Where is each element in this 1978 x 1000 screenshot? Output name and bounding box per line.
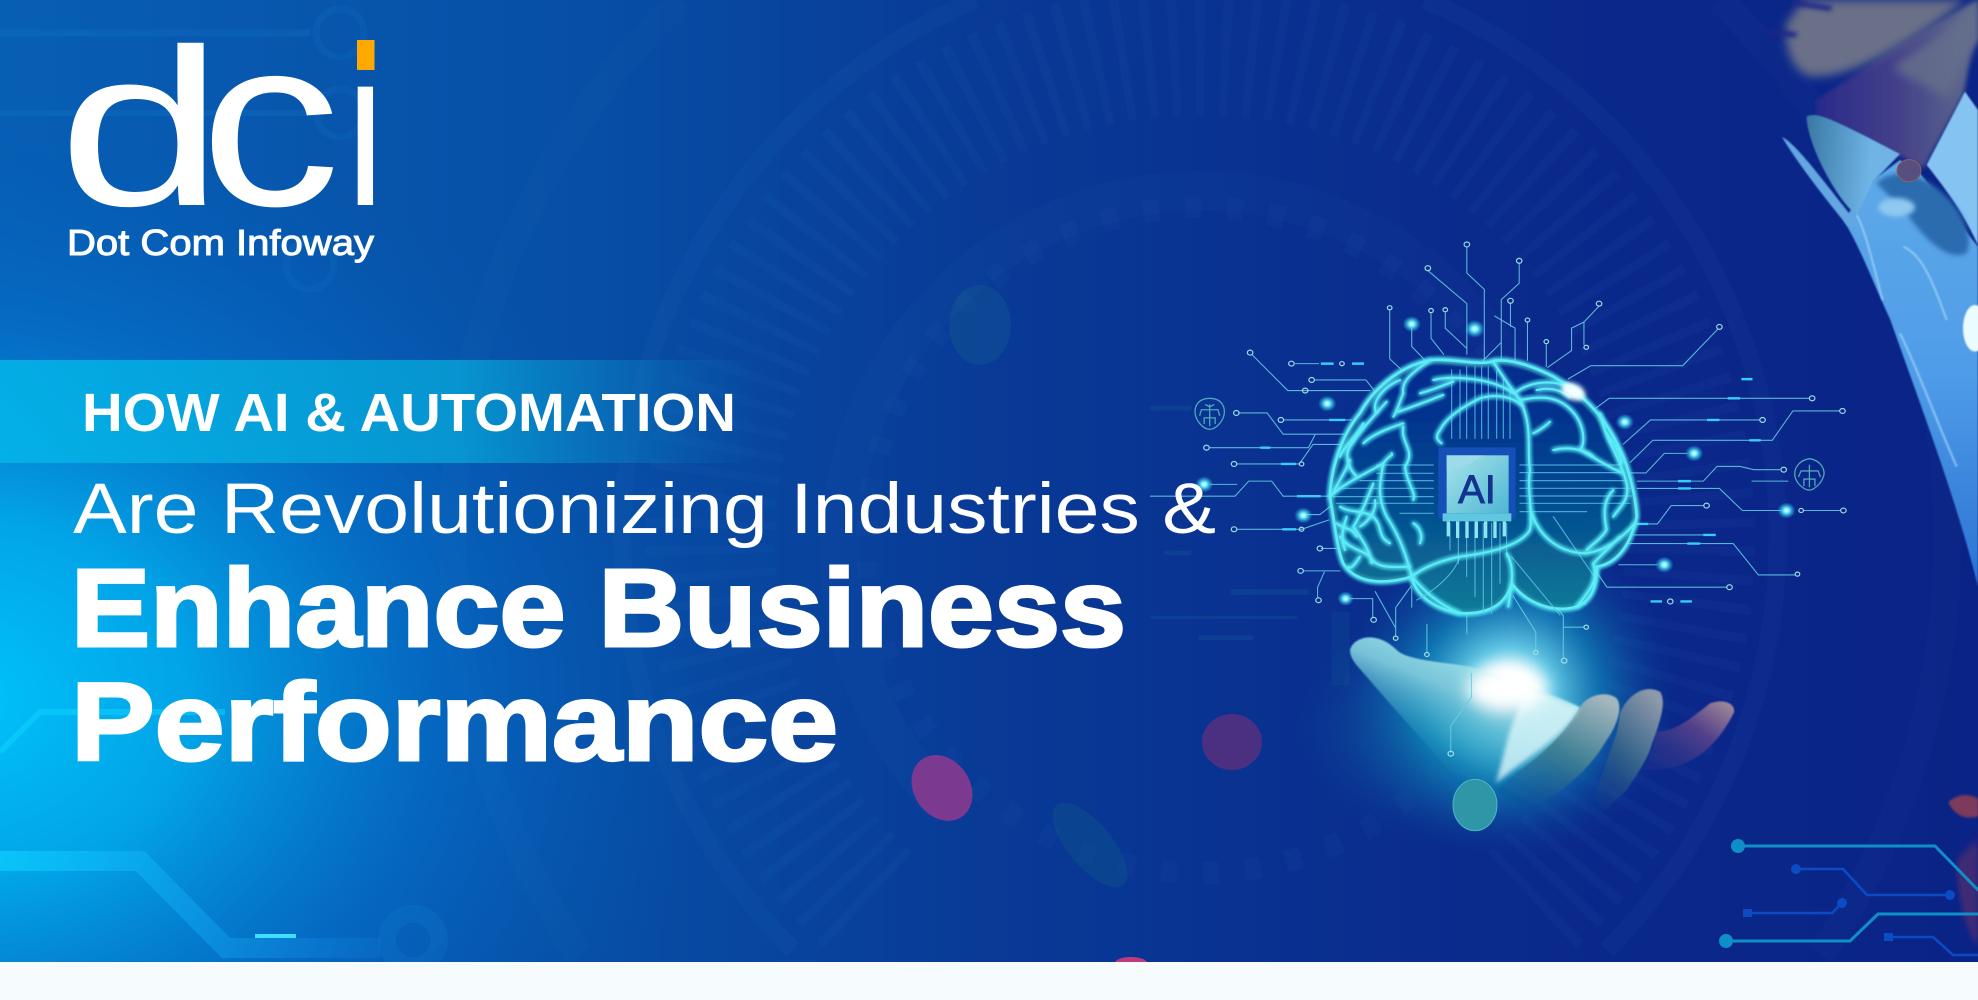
index finger xyxy=(1497,694,1619,804)
collar left xyxy=(1807,115,1900,215)
teal drop xyxy=(1453,779,1497,831)
chip face xyxy=(1447,455,1509,513)
teal underglow xyxy=(1293,607,1613,847)
pink sliver xyxy=(1115,957,1147,962)
red bokeh xyxy=(1202,714,1262,770)
headline xyxy=(71,384,1216,784)
headline line three: Performance xyxy=(71,661,838,784)
green bokeh faint xyxy=(949,285,1011,365)
logo xyxy=(58,0,385,263)
right hand fingers xyxy=(1948,795,1978,944)
trace 4 xyxy=(1726,914,1978,941)
cortex folds xyxy=(1330,360,1635,613)
shirt body xyxy=(1843,160,1978,587)
logo letter d: d xyxy=(58,2,224,253)
shirt crease xyxy=(1857,215,1957,467)
kicker: HOW AI & AUTOMATION xyxy=(82,384,736,443)
pinky finger xyxy=(1642,701,1734,770)
chip fold xyxy=(1447,455,1483,467)
ring finger xyxy=(1587,689,1663,827)
headline line one: Are Revolutionizing Industries & xyxy=(73,470,1216,549)
line end nodes xyxy=(1204,242,1846,756)
headline line two: Enhance Business xyxy=(71,547,1126,670)
background gear rings xyxy=(452,0,1948,955)
jaw right light xyxy=(1893,0,1978,100)
hand glow xyxy=(1343,525,1677,858)
trace 1 xyxy=(1738,846,1978,890)
AI chip xyxy=(1438,447,1516,538)
chip pins xyxy=(1447,521,1506,538)
small brain icon left xyxy=(1195,398,1224,429)
circuit lines xyxy=(1150,247,1841,752)
chip lower band xyxy=(1443,513,1511,521)
chip body xyxy=(1438,447,1516,519)
trace 2 xyxy=(1796,869,1948,895)
brain highlight xyxy=(1558,379,1588,404)
shirt shadow xyxy=(1877,174,1969,255)
collar right xyxy=(1927,92,1978,245)
open hand with light xyxy=(1293,525,1734,858)
person: face and shirt xyxy=(1770,0,1978,587)
inner circuit traces xyxy=(1333,367,1635,615)
collar outer edge xyxy=(1782,137,1860,227)
glowing dots xyxy=(1195,316,1796,606)
small brain icon right xyxy=(1795,459,1824,490)
faint data panels left xyxy=(1150,406,1350,685)
brain xyxy=(1330,360,1637,615)
palm xyxy=(1350,637,1580,783)
neck xyxy=(1817,0,1978,168)
palm core xyxy=(1467,665,1547,712)
green streak xyxy=(1052,803,1128,887)
background circuit traces left xyxy=(0,114,380,958)
shirt highlight spot xyxy=(1878,198,1915,217)
logo letter i: i xyxy=(346,2,385,253)
shirt glare xyxy=(1963,305,1978,352)
trace 5 xyxy=(1888,937,1978,955)
trace 3 xyxy=(1747,903,1842,913)
brain silhouette xyxy=(1330,360,1637,613)
lips shadow xyxy=(1770,3,1832,35)
bright dashes xyxy=(1260,364,1761,604)
logo wordmark: Dot Com Infoway xyxy=(67,222,374,263)
logo orange dot xyxy=(357,40,374,70)
bokeh spots xyxy=(899,285,1262,969)
chip label: AI xyxy=(1458,468,1496,512)
palm wedge light xyxy=(1496,687,1579,783)
pink bokeh xyxy=(912,755,972,821)
bright cyan glow xyxy=(0,264,568,962)
AI circuit illustration xyxy=(1150,242,1846,756)
shirt button xyxy=(1897,160,1921,182)
chin xyxy=(1786,0,1967,76)
strip behind kicker xyxy=(0,360,760,463)
circuit traces bottom right xyxy=(1719,839,1978,955)
